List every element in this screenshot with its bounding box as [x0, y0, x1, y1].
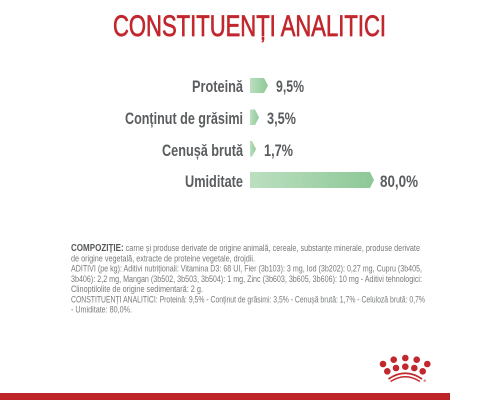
composition text block: de origine vegetală, extracte de proteine vegetale, drojdii.: [71, 254, 255, 264]
row: Umiditate: [185, 172, 418, 191]
title: CONSTITUENȚI ANALITICI: [113, 10, 386, 43]
row: Cenușă brută: Cenușă brută: [162, 142, 244, 160]
row: Proteină: 9,5%: [276, 78, 304, 96]
bar chart: analytical constituents: [125, 78, 418, 191]
row: Umiditate: Umiditate: [185, 173, 243, 191]
red footer band: [0, 393, 450, 400]
composition text block: Clinoptilolite de origine sedimentară: 2 g.: [71, 284, 203, 295]
composition text block: COMPOZIȚIE: carne și produse derivate de origine animală, cereale, substanțe minerale, produse derivate: [71, 242, 420, 254]
row: Umiditate: 80,0%: [380, 173, 418, 191]
composition text block: - Umiditate: 80,0%.: [71, 304, 132, 316]
row: Proteină: [192, 78, 304, 96]
row: Proteină: Proteină: [192, 78, 244, 96]
row: Cenușă brută: 1,7%: [264, 142, 293, 160]
composition text block: [71, 242, 425, 316]
icon: Royal Canin crown logo: [380, 355, 431, 382]
row: Conținut de grăsimi: 3,5%: [267, 110, 296, 128]
row: Conținut de grăsimi: Conținut de grăsimi: [125, 110, 243, 128]
